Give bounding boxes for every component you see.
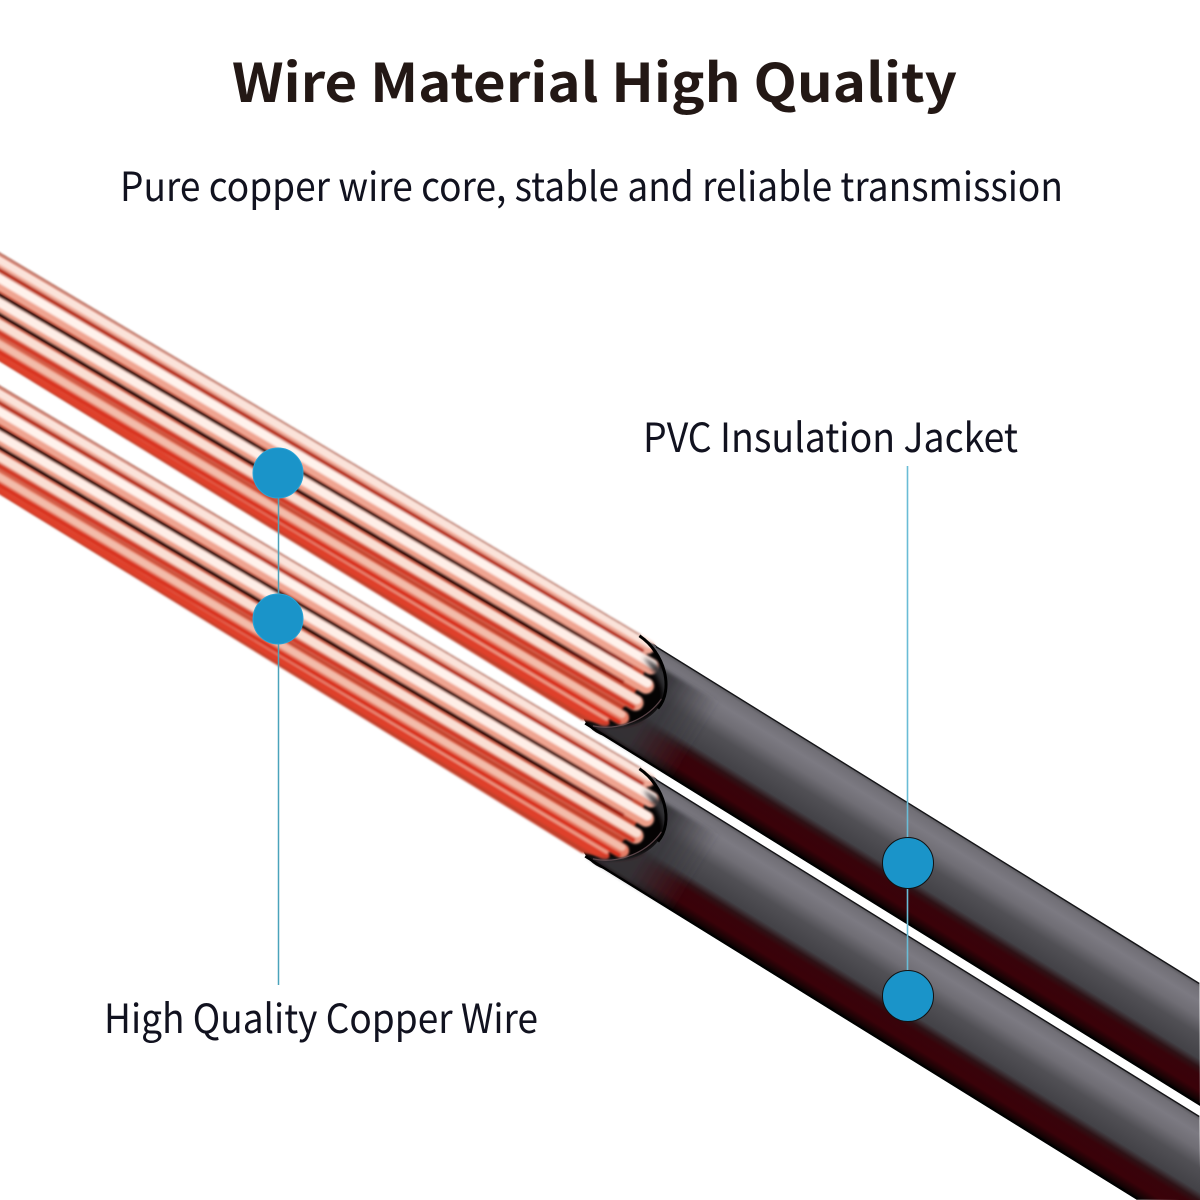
marker: lower jacket (882, 970, 934, 1022)
cable: upper wire with copper strands and PVC jacket (0, 213, 1200, 1107)
label: PVC insulation jacket: PVC Insulation Jacket (643, 406, 1018, 464)
marker: copper lower strand (253, 594, 303, 644)
subtitle: Pure copper wire core, stable and reliable transmission (120, 155, 1063, 213)
title: Wire Material High Quality (232, 42, 957, 118)
marker: upper jacket (882, 838, 934, 888)
callout: copper wire leader line (278, 473, 280, 985)
cable: lower wire with copper strands and PVC jacket (0, 346, 1200, 1200)
callout: jacket leader line (906, 466, 908, 996)
label: high quality copper wire: High Quality Copper Wire (104, 987, 538, 1045)
marker: copper upper strand (253, 448, 303, 498)
